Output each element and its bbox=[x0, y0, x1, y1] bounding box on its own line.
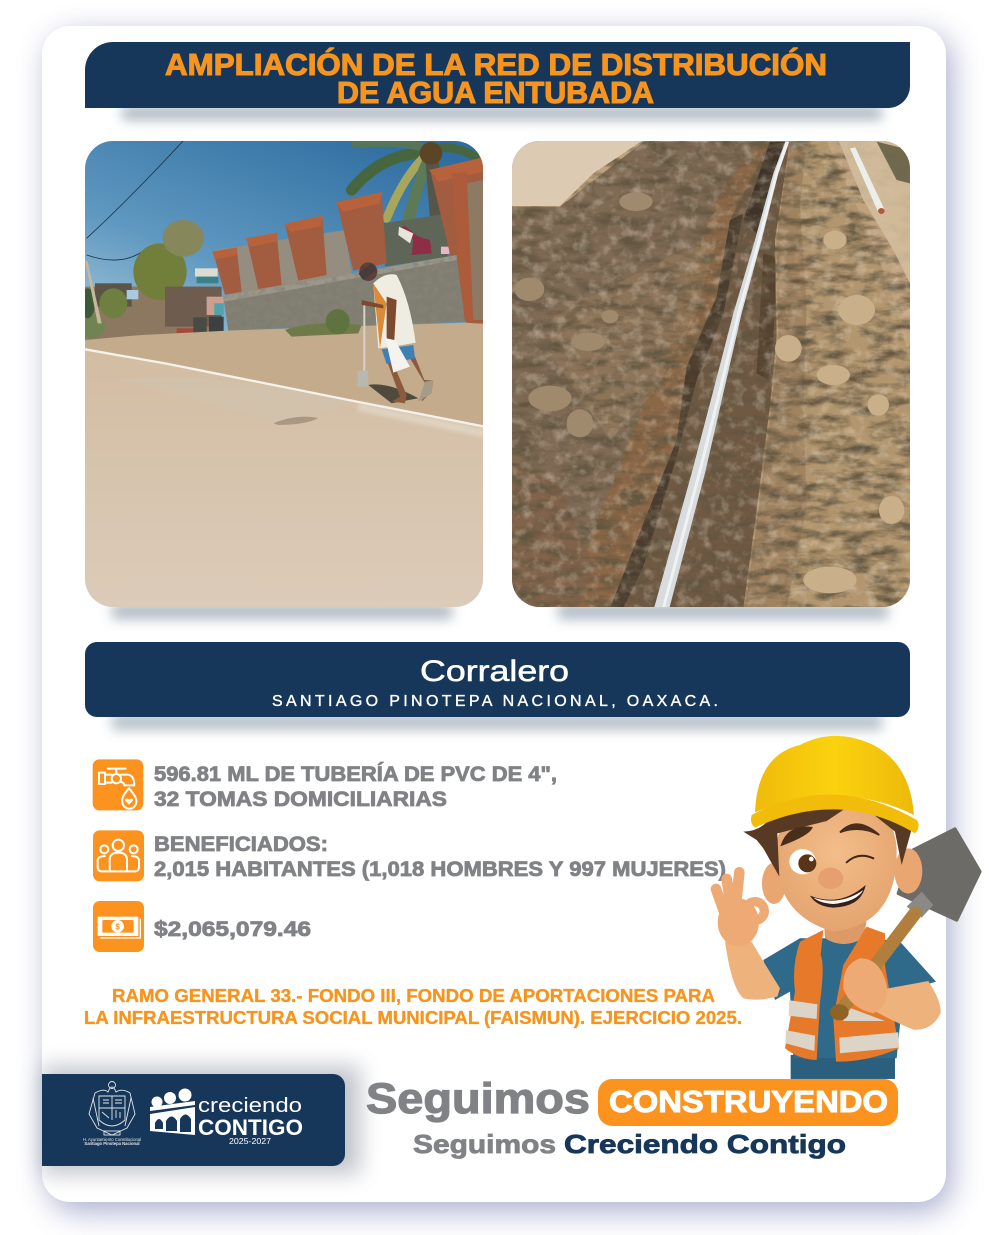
metric: pipe and connections: 32 TOMAS DOMICILIARIAS bbox=[154, 788, 447, 811]
palm tree bbox=[352, 142, 475, 240]
municipality: SANTIAGO PINOTEPA NACIONAL, OAXACA. bbox=[272, 693, 718, 710]
title line 1: AMPLIACIÓN DE LA RED DE DISTRIBUCIÓN bbox=[165, 46, 827, 82]
lime line bbox=[85, 349, 485, 427]
title line 2: DE AGUA ENTUBADA bbox=[337, 75, 654, 110]
icon: people bbox=[93, 830, 144, 881]
brick pillars bbox=[213, 158, 483, 323]
logo panel bbox=[42, 1074, 345, 1166]
right arm and hand bbox=[870, 981, 941, 1030]
nose bbox=[818, 868, 843, 889]
funding source: RAMO GENERAL 33.- FONDO III, FONDO DE APORTACIONES PARA bbox=[112, 986, 715, 1006]
eye bbox=[789, 849, 816, 874]
block wall behind bbox=[215, 230, 352, 297]
left mound bbox=[510, 142, 770, 608]
pipe bbox=[654, 142, 789, 608]
smile bbox=[810, 885, 866, 908]
winking eye bbox=[847, 856, 873, 862]
coat of arms bbox=[89, 1082, 135, 1135]
funding source: LA INFRAESTRUCTURA SOCIAL MUNICIPAL (FAISMUN). EJERCICIO 2025. bbox=[84, 1008, 742, 1028]
hair bbox=[743, 795, 913, 877]
creciendo contigo logo bbox=[150, 1088, 303, 1146]
shovel bbox=[898, 829, 980, 920]
trench floor bbox=[610, 142, 790, 608]
mesh and laundry bbox=[383, 213, 448, 267]
rocks bbox=[514, 192, 653, 437]
construyendo pill bbox=[598, 1079, 898, 1126]
creciendo contigo logo: creciendo bbox=[198, 1095, 302, 1117]
metric: pipe and connections: 596.81 ML DE TUBERÍA DE PVC DE 4", bbox=[154, 763, 557, 786]
icon: banknote bbox=[93, 901, 144, 952]
trees and houses far left bbox=[78, 220, 224, 340]
trousers bbox=[791, 1055, 895, 1079]
sand bbox=[510, 140, 643, 206]
icon: water tap bbox=[93, 759, 143, 810]
header shadow bbox=[122, 106, 882, 120]
community name: Corralero bbox=[420, 655, 569, 688]
slogan: Creciendo Contigo bbox=[564, 1129, 846, 1159]
man with the lime bottle bbox=[358, 262, 433, 403]
ground bbox=[85, 322, 483, 426]
location banner bbox=[85, 642, 910, 717]
logo panel shadow bbox=[42, 1066, 360, 1174]
stone wall bbox=[223, 255, 465, 331]
metric: investment: $2,065,079.46 bbox=[154, 918, 311, 941]
neck bbox=[824, 922, 867, 944]
construyendo pill: CONSTRUYENDO bbox=[609, 1084, 888, 1119]
power line bbox=[87, 141, 183, 260]
seguimos creciendo contigo: Seguimos bbox=[413, 1129, 556, 1159]
slogan bbox=[366, 1075, 898, 1159]
vest bbox=[785, 930, 823, 1060]
funding source bbox=[84, 986, 742, 1028]
seguimos: Seguimos bbox=[366, 1075, 590, 1123]
metric: beneficiaries bbox=[154, 833, 726, 881]
photo: worker marking the street with lime bbox=[78, 140, 485, 607]
municipality caption bbox=[83, 1137, 141, 1146]
icon: banknote: $ bbox=[115, 922, 120, 931]
clay texture bbox=[510, 140, 913, 608]
head bbox=[776, 800, 897, 932]
location banner shadow bbox=[112, 714, 882, 730]
handle bbox=[840, 913, 915, 1012]
photo shadows bbox=[112, 604, 888, 619]
shirt bbox=[763, 938, 936, 1058]
metric: beneficiaries: 2,015 HABITANTES (1,018 HOMBRES Y 997 MUJERES) bbox=[154, 858, 726, 881]
creciendo contigo logo: CONTIGO bbox=[198, 1115, 303, 1140]
metric: pipe and connections bbox=[154, 763, 557, 811]
left arm bbox=[725, 942, 780, 1000]
mascot: construction worker with shovel bbox=[716, 736, 980, 1079]
title banner bbox=[85, 42, 910, 110]
eyebrows bbox=[782, 824, 879, 845]
municipality caption: H. Ayuntamiento Constitucional bbox=[83, 1137, 141, 1142]
OK hand bbox=[716, 872, 764, 946]
helmet bbox=[755, 736, 914, 815]
metric: beneficiaries: BENEFICIADOS: bbox=[154, 833, 328, 856]
municipality caption: Santiago Pinotepa Nacional bbox=[84, 1141, 140, 1146]
photo: open trench with white PVC pipe bbox=[510, 140, 913, 608]
ears bbox=[762, 863, 786, 904]
right mound bbox=[743, 142, 913, 608]
creciendo contigo logo: 2025-2027 bbox=[229, 1136, 271, 1146]
loose pipe bbox=[850, 147, 884, 214]
